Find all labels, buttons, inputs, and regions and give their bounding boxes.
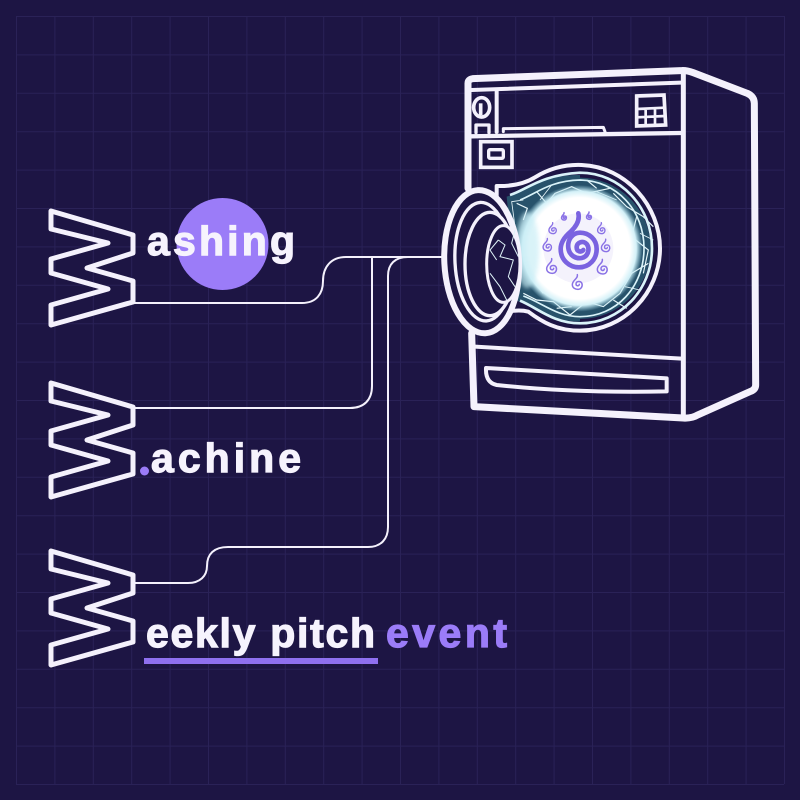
word: event: event (386, 610, 507, 656)
main swirl icon (561, 213, 597, 267)
letter W: Weekly (51, 551, 133, 665)
washing machine (441, 71, 756, 418)
glow (516, 185, 643, 312)
letter W: Washing (51, 211, 133, 325)
word: ashing: ashing (147, 218, 295, 264)
letter W: Machine (51, 383, 133, 497)
underline (144, 658, 378, 664)
detergent box (481, 142, 512, 167)
door housing (497, 165, 660, 331)
purple dot (140, 466, 149, 476)
door frame (441, 188, 523, 335)
word: eekly pitch: eekly pitch (146, 610, 375, 656)
door window cracks (490, 230, 518, 300)
drum ring (509, 178, 651, 319)
word: achine: achine (151, 435, 301, 481)
machine body (468, 71, 756, 418)
drum cracks (512, 180, 653, 315)
control keypad (637, 95, 666, 126)
power button (474, 98, 490, 117)
connector lines (133, 257, 444, 583)
highlight circle (176, 198, 268, 290)
small swirls (543, 212, 610, 289)
swirl backdrop (543, 213, 613, 283)
drum rim (510, 173, 652, 323)
